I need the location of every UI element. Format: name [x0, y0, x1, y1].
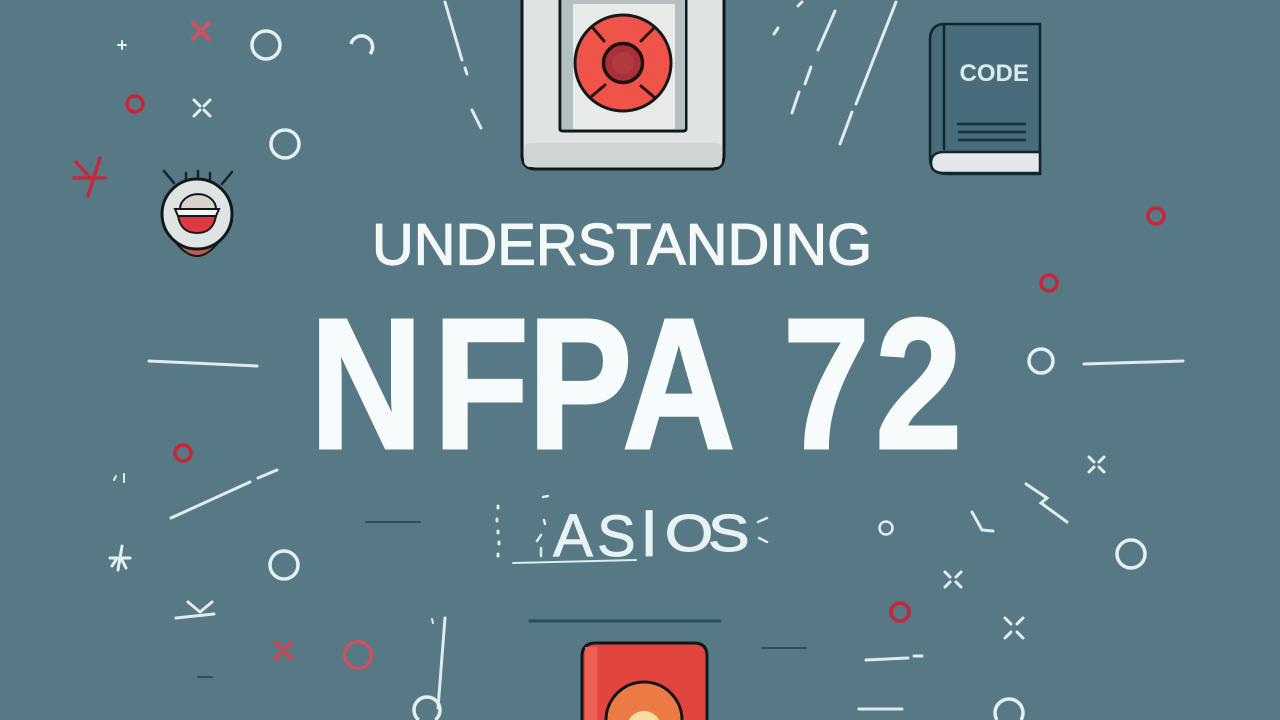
- subtitle: garbled basics: I: [640, 496, 658, 570]
- light sparkles: [110, 41, 1104, 638]
- icon: fire alarm pull station top: [522, 0, 724, 169]
- subtitle: garbled basics: S: [597, 504, 636, 569]
- dark divider lines: [198, 522, 806, 677]
- title: understanding: UNDERSTANDING: [372, 213, 872, 278]
- light rings: [252, 31, 1145, 720]
- subtitle: garbled basics: S: [708, 505, 750, 563]
- subtitle: garbled basics: A: [553, 502, 593, 569]
- subtitle: garbled basics: [497, 496, 767, 570]
- subtitle: garbled basics: O: [665, 505, 713, 563]
- red sparkles: [74, 23, 291, 658]
- icon: smoke detector: [162, 171, 232, 256]
- book label: CODE: [960, 60, 1029, 87]
- icon: red alarm box bottom: [582, 643, 707, 720]
- title: NFPA 72: NFPA 72: [310, 281, 962, 488]
- red rings: [127, 96, 1164, 668]
- icon: code book: [930, 24, 1040, 174]
- icon: red alarm button: [575, 15, 671, 111]
